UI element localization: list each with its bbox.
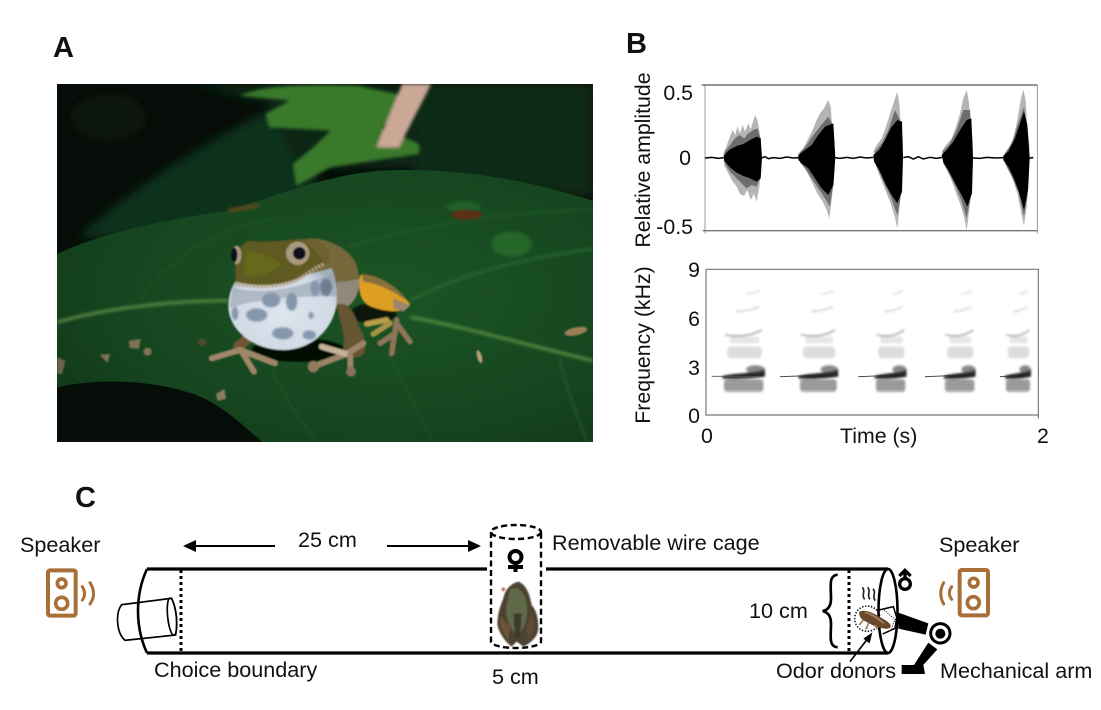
waveform y axis title: Relative amplitude <box>631 72 655 248</box>
panel label C: C <box>75 482 96 514</box>
panel A: photo of calling frog on leaf <box>57 84 593 442</box>
choice boundary dotted line <box>180 570 182 652</box>
waveform trace <box>702 85 1037 233</box>
test cylinder at left end <box>118 598 178 640</box>
spectrogram y tick labels: 6 <box>688 307 700 331</box>
mechanical arm label: Mechanical arm <box>940 658 1092 683</box>
spectrogram x axis labels: Time (s) <box>840 424 917 448</box>
leaf <box>57 170 593 442</box>
spectrogram x axis labels: 0 <box>701 424 713 448</box>
odor donors label: Odor donors <box>776 658 896 683</box>
spectrogram y tick labels: 9 <box>688 258 700 282</box>
left speaker icon <box>48 570 93 616</box>
waveform chart <box>631 72 1037 248</box>
odor side boundary dotted line <box>848 570 850 652</box>
waveform y tick labels <box>656 81 693 239</box>
right speaker label: Speaker <box>939 532 1019 557</box>
odor lines <box>862 587 875 601</box>
spectrogram y tick labels: 3 <box>688 356 700 380</box>
right arrow for 25 cm <box>387 540 481 552</box>
distance label 25 cm: 25 cm <box>298 527 357 552</box>
spectrogram chart <box>631 258 1049 448</box>
left hind foot <box>212 337 275 372</box>
panel label B: B <box>626 28 647 60</box>
body <box>300 238 359 307</box>
mechanical arm <box>898 613 928 635</box>
male symbol <box>899 570 911 589</box>
distance label 5 cm: 5 cm <box>492 664 539 689</box>
frog in photo <box>212 238 410 377</box>
female symbol <box>508 551 523 572</box>
far foot <box>367 320 410 353</box>
spectrogram bands <box>706 269 1038 418</box>
donor frog <box>859 611 891 629</box>
spectrogram y tick labels <box>688 258 700 428</box>
spectrogram x axis labels: 2 <box>1037 424 1049 448</box>
front arm <box>337 304 365 358</box>
left arrow for 25 cm <box>183 540 275 552</box>
caged frog <box>497 582 538 647</box>
mouth beads <box>235 264 325 286</box>
curly brace <box>823 575 838 647</box>
spectrogram x axis labels <box>701 424 1049 448</box>
vocal sac <box>228 268 337 350</box>
waveform y tick labels: 0 <box>679 146 691 170</box>
panel label A: A <box>53 32 74 64</box>
choice boundary label: Choice boundary <box>154 657 317 682</box>
arrow to donors <box>850 637 869 662</box>
spectrogram y axis title: Frequency (kHz) <box>631 266 655 424</box>
distance label 10 cm: 10 cm <box>749 598 808 623</box>
wire cage with female frog <box>491 525 541 648</box>
spectrogram y tick labels: 0 <box>688 404 700 428</box>
head <box>235 238 329 285</box>
odor donor assembly <box>850 587 950 674</box>
donor cone <box>879 607 897 634</box>
cage outline <box>491 525 541 648</box>
waveform y tick labels: 0.5 <box>663 81 693 105</box>
removable wire cage label: Removable wire cage <box>552 530 760 555</box>
right speaker icon <box>941 570 988 615</box>
waveform y tick labels: -0.5 <box>656 215 693 239</box>
choice tube <box>138 569 898 653</box>
yellow thigh <box>359 275 410 311</box>
left speaker label: Speaker <box>20 532 100 557</box>
eyes <box>286 242 309 265</box>
dotted odor enclosure <box>855 606 880 631</box>
